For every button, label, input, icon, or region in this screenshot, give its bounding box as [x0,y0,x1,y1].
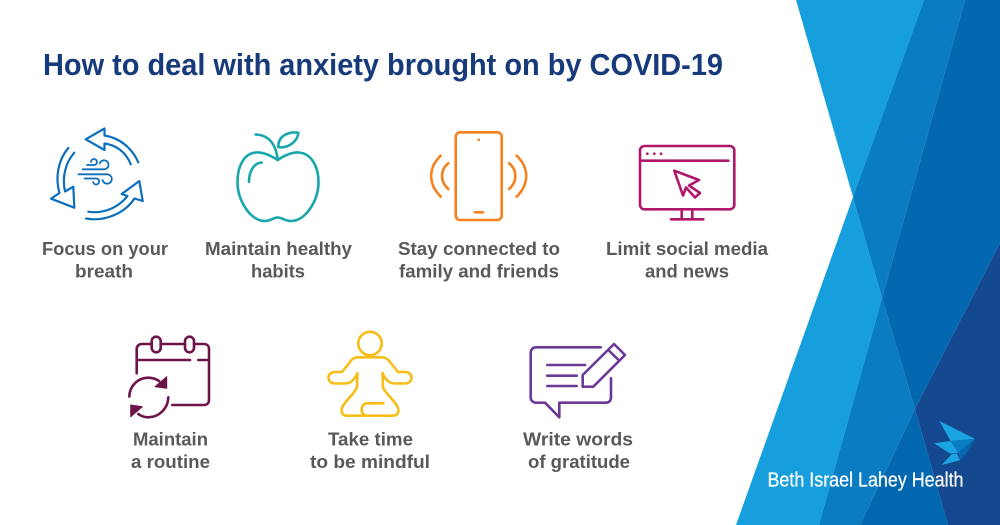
label: take time to be mindful [310,430,430,472]
label: focus on your breath [42,239,168,282]
label: take time to be mindful: to be mindful [310,452,430,472]
label: focus on your breath: Focus on your [42,239,168,259]
icon: speech bubble with pencil [531,344,625,417]
title: How to deal with anxiety brought on by COVID-19 [43,47,723,82]
panel: focus on your breath [42,128,168,282]
icon: breathing arrows and wind [51,128,143,219]
label: limit social media and news: Limit social media [606,239,769,259]
label: maintain a routine: a routine [131,452,210,472]
label: focus on your breath: breath [75,262,133,282]
label: maintain healthy habits: Maintain healthy [205,239,352,259]
label: write words of gratitude: Write words [523,430,633,450]
logo: Beth Israel Lahey Health [768,421,975,492]
icon: monitor with cursor [640,146,734,219]
panel: limit social media [606,146,769,282]
panel: maintain a routine [129,337,210,472]
icon: meditating person [328,332,412,416]
label: maintain healthy habits [205,239,352,282]
label: maintain a routine: Maintain [133,430,208,450]
panel: maintain healthy habits [205,132,352,282]
label: write words of gratitude: of gratitude [528,452,630,472]
logo wordmark: Beth Israel Lahey Health [768,470,964,492]
panel: blue geometric background [736,0,1000,525]
panel: take time to be mindful [310,332,430,472]
label: limit social media and news [606,239,769,282]
label: write words of gratitude [523,430,633,472]
label: take time to be mindful: Take time [328,430,413,450]
label: stay connected to family and friends: family and friends [399,262,559,282]
label: maintain healthy habits: habits [251,262,305,282]
label: limit social media and news: and news [645,262,729,282]
icon: logo bird mark [934,421,975,465]
label: stay connected to family and friends [398,239,560,282]
icon: vibrating phone [431,132,526,220]
icon: apple [238,132,318,221]
panel: write words of gratitude [523,344,633,472]
label: maintain a routine [131,430,210,472]
icon: calendar with refresh arrows [129,337,209,417]
label: stay connected to family and friends: Stay connected to [398,239,560,259]
panel: stay connected [398,132,560,282]
